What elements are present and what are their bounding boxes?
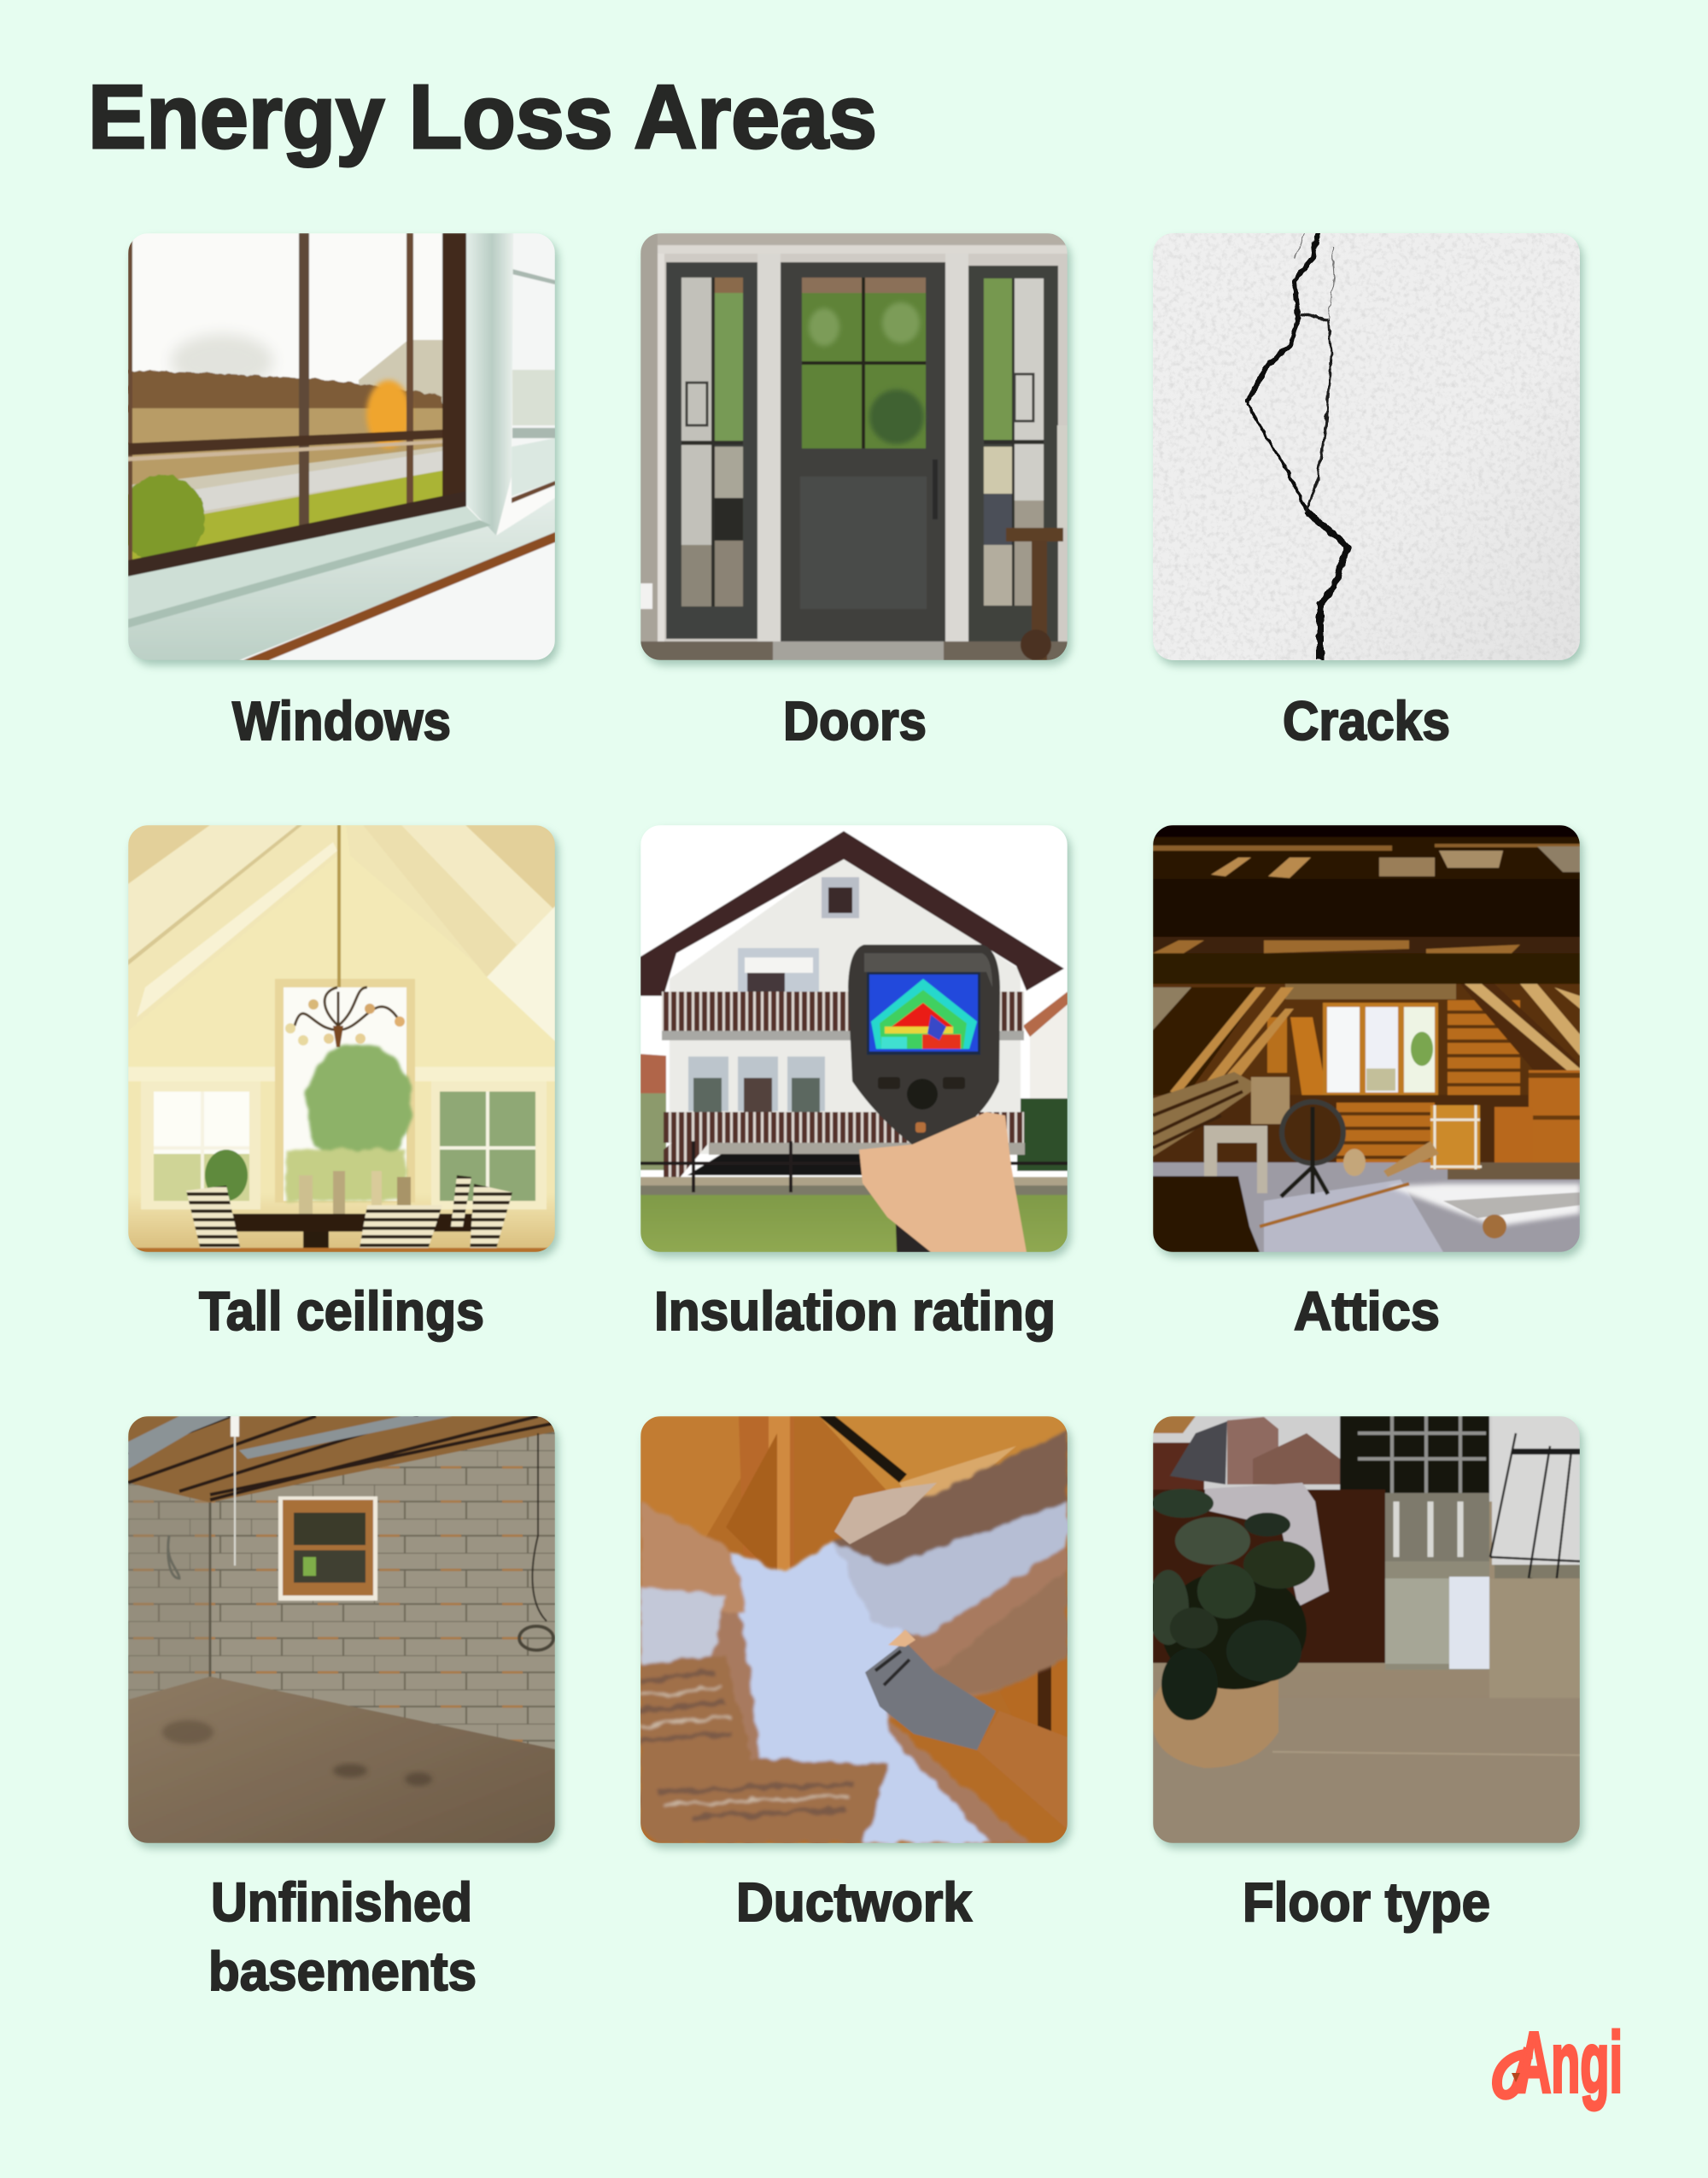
- photo: concrete block basement: [128, 1416, 555, 1843]
- dining table and chairs: [128, 1171, 555, 1252]
- label: Floor type: Floor type: [1243, 1871, 1490, 1933]
- photo: house with thermal camera: [640, 825, 1068, 1252]
- right sidelight: [968, 266, 1058, 641]
- photo: window frame and sill: [120, 233, 555, 660]
- panel: tall ceilings: [128, 825, 559, 1342]
- photo: front door with sidelights: [640, 233, 1068, 660]
- label: Windows: Windows: [232, 690, 451, 752]
- panel: unfinished basements: [128, 1416, 559, 2002]
- label: Tall ceilings: Tall ceilings: [199, 1280, 484, 1342]
- panel: floor type: [1148, 1416, 1583, 1933]
- thermal camera: [848, 945, 1000, 1252]
- hand: [859, 1112, 1027, 1252]
- panel: cracks: [1153, 233, 1583, 752]
- title: Energy Loss Areas: [88, 67, 877, 167]
- attic window: [1285, 984, 1456, 1095]
- label: Doors: Doors: [783, 690, 927, 752]
- floor: [1153, 1162, 1580, 1252]
- logo: Angi: [1497, 2015, 1623, 2111]
- label: Unfinished basements: [208, 1871, 477, 2002]
- panel: windows: [120, 233, 559, 752]
- lower arm and glove: [865, 1630, 1068, 1830]
- photo: polished concrete floor: [1148, 1416, 1580, 1843]
- photo: cracked white wall: [1153, 233, 1580, 660]
- rafters: [1153, 987, 1264, 1095]
- photo: foil duct with gloved hands: [640, 1416, 1068, 1843]
- panel: insulation rating: [640, 825, 1071, 1342]
- label: Insulation rating: Insulation rating: [654, 1280, 1056, 1342]
- foil duct: [640, 1429, 1068, 1843]
- label: Ductwork: Ductwork: [736, 1871, 972, 1933]
- potted plant: [1148, 1489, 1315, 1768]
- panel: attics: [1153, 825, 1583, 1342]
- upper hand: [834, 1483, 937, 1544]
- panel: ductwork: [640, 1416, 1071, 1933]
- label: Unfinished basements: Unfinished: [211, 1871, 472, 1933]
- panel: doors: [640, 233, 1071, 752]
- label: Attics: Attics: [1294, 1280, 1440, 1342]
- photo: wooden attic interior: [1153, 825, 1580, 1252]
- logo: Angi: Angi: [1517, 2015, 1623, 2111]
- left sidelight: [666, 262, 757, 639]
- main door: [781, 262, 945, 641]
- chandelier: [285, 825, 405, 1047]
- photo: vaulted dining room: [128, 825, 555, 1252]
- label: Unfinished basements: basements: [208, 1941, 477, 2002]
- label: Cracks: Cracks: [1283, 690, 1450, 752]
- sofa: [1153, 1416, 1385, 1663]
- lumber and furniture: [1153, 1072, 1260, 1156]
